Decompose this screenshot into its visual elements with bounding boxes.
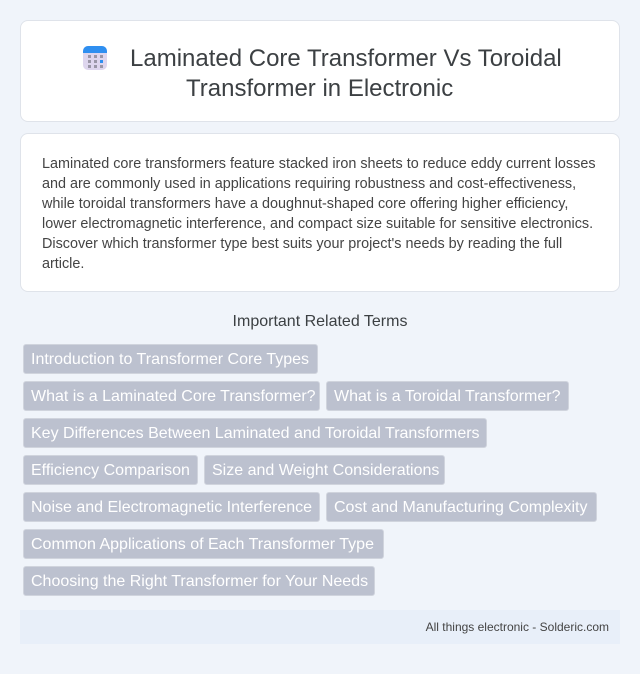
title (130, 45, 562, 102)
chip: cost (326, 492, 597, 522)
description text: Laminated core transformers feature stacked iron sheets to reduce eddy current losses (42, 156, 596, 172)
footer bar (20, 610, 620, 644)
description text (42, 156, 596, 272)
title: Transformer in Electronic (186, 75, 453, 102)
related terms heading: Important Related Terms (233, 313, 407, 330)
chip: toroidal (326, 381, 569, 411)
description card (20, 133, 620, 292)
chip: laminated: What is a Laminated Core Transformer? (31, 388, 316, 405)
chip list (23, 344, 597, 596)
chip: efficiency (23, 455, 198, 485)
chip: laminated (23, 381, 320, 411)
chip: applications (23, 529, 384, 559)
chip: key differences (23, 418, 487, 448)
chip: size and weight (204, 455, 445, 485)
description text: article. (42, 256, 84, 272)
chip: efficiency: Efficiency Comparison (31, 462, 190, 479)
chip: noise (23, 492, 320, 522)
chip: choosing (23, 566, 375, 596)
description text: lower electromagnetic interference, and compact size suitable for sensitive electronics. (42, 216, 593, 232)
chip: cost: Cost and Manufacturing Complexity (334, 499, 587, 516)
icon: calendar (83, 46, 107, 70)
chip: size and weight: Size and Weight Considerations (212, 462, 439, 479)
chip: introduction (23, 344, 318, 374)
description text: and are commonly used in applications requiring robustness and cost-effectiveness, (42, 176, 576, 192)
description text: while toroidal transformers have a doughnut-shaped core offering higher efficiency, (42, 196, 568, 212)
header card (20, 20, 620, 122)
chip: applications: Common Applications of Each Transformer Type (31, 536, 374, 553)
chip: choosing: Choosing the Right Transformer for Your Needs (31, 573, 368, 590)
chip: introduction: Introduction to Transformer Core Types (31, 351, 309, 368)
chip: toroidal: What is a Toroidal Transformer? (334, 388, 560, 405)
chip: key differences: Key Differences Between Laminated and Toroidal Transformers (31, 425, 480, 442)
title: Laminated Core Transformer Vs Toroidal (130, 45, 562, 72)
description text: Discover which transformer type best suits your project's needs by reading the full (42, 236, 562, 252)
footer text: All things electronic - Solderic.com (426, 620, 609, 634)
chip: noise: Noise and Electromagnetic Interference (31, 499, 312, 516)
